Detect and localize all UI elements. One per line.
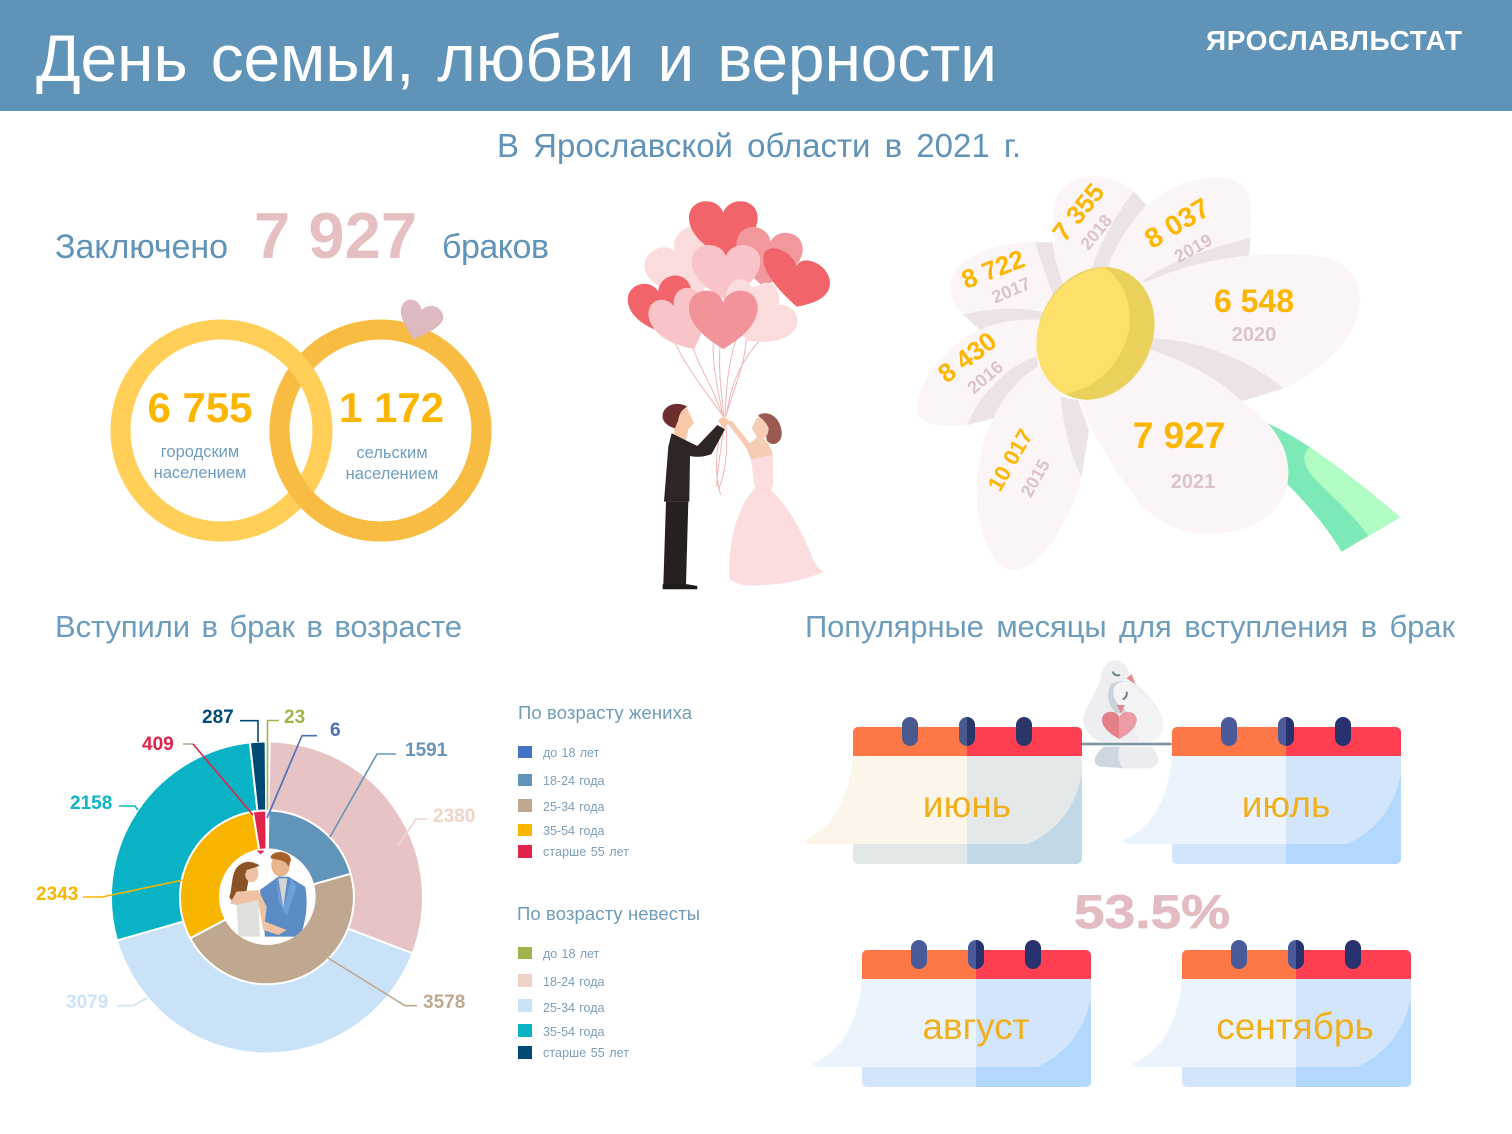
urban marriages: населением (154, 464, 246, 482)
legend: groom age: до 18 лет (543, 746, 600, 760)
month label: август (922, 1006, 1030, 1047)
year 2021 (1133, 415, 1225, 493)
label 2380: 2380 (433, 806, 475, 827)
label 2343: 2343 (36, 884, 78, 905)
marriages headline: Заключено (55, 228, 228, 266)
label 6 (267, 720, 341, 818)
interlocked rings: urban and rural (120, 300, 482, 532)
rural marriages: сельским (356, 444, 428, 462)
year 2018: 7 355 (1046, 177, 1110, 247)
legend: bride age: до 18 лет (543, 947, 600, 961)
outer ring: brides (111, 742, 423, 1054)
legend: bride age: По возрасту невесты (517, 903, 700, 924)
month label: сентябрь (1216, 1006, 1374, 1047)
total marriages number: 7 927 (254, 199, 417, 272)
legend: bride age: 18-24 года (543, 975, 604, 989)
calendar: August (814, 940, 1091, 1087)
legend: groom age (518, 702, 693, 859)
month label: июнь (923, 784, 1011, 825)
label 409 (142, 734, 253, 815)
rural marriages (339, 384, 444, 483)
legend: groom age: По возрасту жениха (518, 702, 693, 723)
label 23 (268, 707, 305, 810)
legend: groom age: 35-54 года (543, 824, 604, 838)
urban marriages: 6 755 (147, 384, 253, 431)
year 2021: 2021 (1171, 471, 1215, 493)
bride (726, 413, 824, 585)
label 2343 (36, 880, 183, 905)
year 2021: 7 927 (1133, 415, 1225, 456)
label 3079 (66, 992, 147, 1013)
label 6: 6 (330, 720, 341, 741)
legend: groom age: 18-24 года (543, 774, 604, 788)
legend: groom age: старше 55 лет (543, 845, 629, 859)
legend: bride age: 35-54 года (543, 1025, 604, 1039)
label 287 (202, 707, 258, 742)
title: День семьи, любви и верности (36, 21, 997, 95)
illustration: couple with heart balloons (624, 201, 830, 589)
year 2020: 2020 (1232, 324, 1276, 346)
label 3079: 3079 (66, 992, 108, 1013)
year 2017: 2017 (989, 273, 1033, 307)
flower centre (1015, 247, 1176, 419)
urban marriages (147, 384, 253, 482)
label 3578: 3578 (423, 992, 465, 1013)
rural marriages: населением (346, 465, 438, 483)
year 2015: 2015 (1017, 456, 1054, 500)
urban marriages: городским (161, 443, 239, 461)
label 1591 (330, 740, 448, 837)
petals (917, 176, 1360, 570)
label 409: 409 (142, 734, 174, 755)
year 2016: 8 430 (932, 326, 1002, 389)
stem (1262, 421, 1400, 552)
share of marriages: 53.5% (1074, 885, 1230, 938)
year 2017: 8 722 (957, 243, 1029, 295)
year 2019: 8 037 (1139, 192, 1215, 255)
header banner (0, 0, 1512, 111)
year 2020: 6 548 (1214, 283, 1294, 319)
label 3578 (328, 958, 465, 1013)
calendar: July (1124, 717, 1401, 864)
heading: age: Вступили в брак в возрасте (55, 609, 462, 644)
icon: ring heart (401, 300, 443, 339)
rural marriages: 1 172 (339, 384, 444, 431)
label 1591: 1591 (405, 740, 448, 761)
heading: popular months: Популярные месяцы для вступления в брак (805, 609, 1455, 644)
label 2158: 2158 (70, 793, 112, 814)
icon: doves with heart (1081, 661, 1172, 768)
year 2020 (1214, 283, 1294, 346)
legend: bride age: 25-34 года (543, 1001, 604, 1015)
icon: couple in centre (219, 848, 316, 945)
donut chart: age at marriage (36, 707, 475, 1054)
subtitle: В Ярославской области в 2021 г. (497, 127, 1021, 164)
label 23: 23 (284, 707, 305, 728)
year 2016: 2016 (963, 357, 1007, 398)
flower chart: marriages by year (917, 176, 1400, 570)
month label: июль (1242, 784, 1330, 825)
year 2019: 2019 (1171, 230, 1216, 267)
groom (663, 404, 729, 589)
legend: bride age: старше 55 лет (543, 1046, 629, 1060)
marriages headline: браков (442, 228, 549, 266)
legend: groom age: 25-34 года (543, 800, 604, 814)
organisation name: ЯРОСЛАВЛЬСТАТ (1206, 25, 1462, 56)
inner ring: grooms (180, 810, 354, 984)
marriages headline (55, 199, 549, 272)
label 2380 (397, 806, 475, 847)
year 2018: 2018 (1076, 210, 1116, 254)
calendar: September (1134, 940, 1411, 1087)
label 2158 (70, 793, 138, 814)
calendar: June (805, 717, 1082, 864)
year 2015: 10 017 (983, 425, 1038, 495)
legend: bride age (517, 903, 700, 1060)
label 287: 287 (202, 707, 234, 728)
